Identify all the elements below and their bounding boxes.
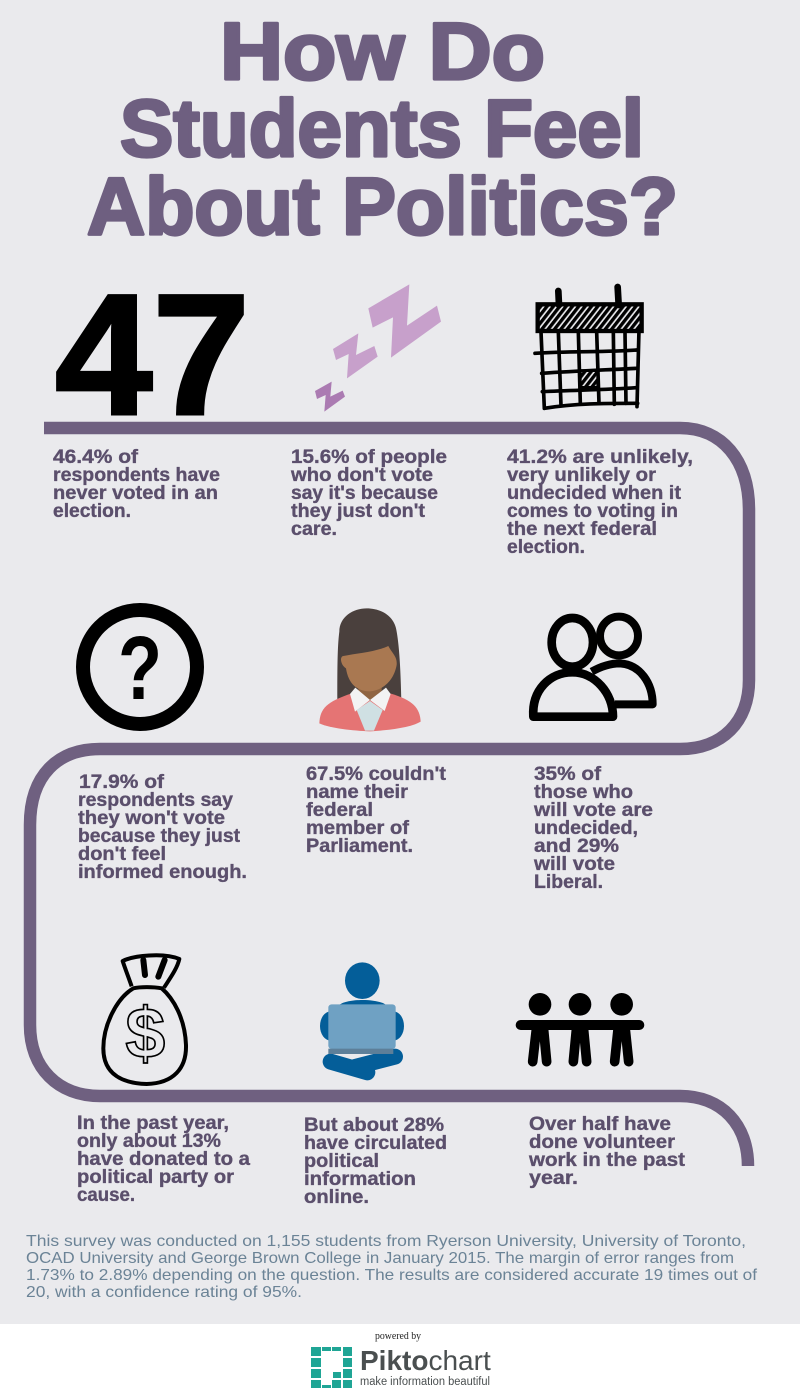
panel: volunteer work — [521, 993, 686, 1189]
text: over half volunteered: Over half have — [529, 1114, 671, 1135]
text: 13% donated: political party or — [77, 1167, 235, 1188]
icon: woman avatar — [319, 608, 421, 731]
text: over half volunteered — [528, 1114, 686, 1189]
text: 46.4% never voted: respondents have — [53, 465, 220, 486]
survey footnote — [26, 1233, 758, 1301]
icon: two people outline — [533, 617, 653, 717]
text: 28% circulated: information — [304, 1169, 416, 1190]
icon: person with laptop — [320, 962, 404, 1072]
big number 47: 47 — [55, 259, 250, 451]
text: 17.9% not informed: informed enough. — [78, 862, 247, 883]
text: 67.5% couldn't name MP: Parliament. — [306, 836, 413, 857]
text: 41.2% unlikely: 41.2% are unlikely, — [507, 447, 693, 468]
text: 13% donated: have donated to a — [77, 1149, 250, 1170]
icon: question mark circle: ? — [118, 619, 162, 719]
text: 28% circulated: But about 28% — [304, 1115, 444, 1136]
winding ribbon divider — [30, 428, 749, 1166]
panel: undecided voters — [533, 617, 653, 893]
text: 46.4% never voted — [53, 447, 220, 522]
icon: question mark circle — [83, 610, 197, 724]
text: 15.6% don't care: say it's because — [291, 483, 438, 504]
title: Students Feel — [120, 84, 644, 174]
text: 35% undecided: and 29% — [534, 836, 619, 857]
panel: never voted — [53, 259, 250, 522]
text: 17.9% not informed: don't feel — [78, 844, 166, 865]
logo tagline: make information beautiful — [360, 1376, 490, 1388]
text: 28% circulated: online. — [304, 1187, 369, 1208]
text: 28% circulated — [304, 1115, 447, 1208]
text: 41.2% unlikely: comes to voting in — [507, 501, 678, 522]
text: 67.5% couldn't name MP: 67.5% couldn't — [306, 764, 447, 785]
text: 15.6% don't care: who don't vote — [290, 465, 433, 486]
text: 13% donated: cause. — [77, 1185, 135, 1206]
panel: donations — [77, 955, 250, 1206]
text: 17.9% not informed: they won't vote — [78, 808, 225, 829]
title — [87, 7, 678, 252]
text: 13% donated: In the past year, — [77, 1113, 229, 1134]
text: 35% undecided: 35% of — [534, 764, 602, 785]
text: 15.6% don't care: care. — [291, 519, 337, 540]
text: 67.5% couldn't name MP: member of — [306, 818, 410, 839]
icon: sleeping zzz — [315, 284, 441, 412]
text: 67.5% couldn't name MP — [306, 764, 447, 857]
text: 67.5% couldn't name MP: federal — [306, 800, 373, 821]
text: 41.2% unlikely — [507, 447, 693, 558]
text: 41.2% unlikely: undecided when it — [507, 483, 682, 504]
title: About Politics? — [87, 162, 678, 252]
text: over half volunteered: done volunteer — [529, 1132, 676, 1153]
text: 28% circulated: political — [304, 1151, 379, 1172]
text: 35% undecided: will vote are — [533, 800, 653, 821]
text: 13% donated — [77, 1113, 250, 1206]
text: 35% undecided — [533, 764, 653, 893]
text: 67.5% couldn't name MP: name their — [306, 782, 409, 803]
text: over half volunteered: work in the past — [528, 1150, 686, 1171]
text: 28% circulated: have circulated — [304, 1133, 447, 1154]
text: 46.4% never voted: election. — [53, 501, 131, 522]
icon: calendar — [535, 287, 642, 408]
panel: member of parliament — [306, 608, 447, 857]
logo wordmark: Piktochart — [360, 1345, 491, 1376]
icon: money bag — [103, 955, 186, 1084]
text: 41.2% unlikely: the next federal — [507, 519, 657, 540]
survey footnote: This survey was conducted on 1,155 students from Ryerson University, University of Toronto, — [26, 1233, 746, 1250]
survey footnote: 20, with a confidence rating of 95%. — [26, 1284, 302, 1301]
text: 41.2% unlikely: election. — [507, 537, 585, 558]
title: How Do — [220, 7, 545, 97]
icon: Piktochart logo — [311, 1347, 352, 1388]
footer: powered by Piktochart: powered by — [375, 1331, 422, 1342]
text: 35% undecided: will vote — [533, 854, 615, 875]
text: 17.9% not informed — [78, 772, 247, 883]
text: 15.6% don't care: 15.6% of people — [291, 447, 447, 468]
text: 13% donated: only about 13% — [77, 1131, 221, 1152]
icon: money bag: $ — [125, 994, 165, 1074]
text: 35% undecided: those who — [534, 782, 633, 803]
survey footnote: 1.73% to 2.89% depending on the question. The results are considered accurate 19 times out of — [26, 1267, 758, 1284]
panel: unlikely to vote — [507, 287, 693, 558]
footer: powered by Piktochart — [0, 1324, 800, 1397]
panel: don't care — [290, 284, 447, 540]
text: over half volunteered: year. — [529, 1168, 578, 1189]
text: 46.4% never voted: never voted in an — [53, 483, 218, 504]
text: 35% undecided: Liberal. — [534, 872, 603, 893]
text: 41.2% unlikely: very unlikely or — [507, 465, 657, 486]
text: 15.6% don't care — [290, 447, 447, 540]
panel: online circulation — [304, 962, 447, 1208]
panel: not informed — [78, 610, 247, 883]
text: 46.4% never voted: 46.4% of — [53, 447, 139, 468]
icon: three people linked — [521, 993, 639, 1062]
text: 15.6% don't care: they just don't — [291, 501, 426, 522]
text: 17.9% not informed: respondents say — [78, 790, 233, 811]
text: 35% undecided: undecided, — [534, 818, 638, 839]
text: 17.9% not informed: 17.9% of — [79, 772, 165, 793]
survey footnote: OCAD University and George Brown College in January 2015. The margin of error ranges from — [26, 1250, 734, 1267]
text: 17.9% not informed: because they just — [78, 826, 241, 847]
